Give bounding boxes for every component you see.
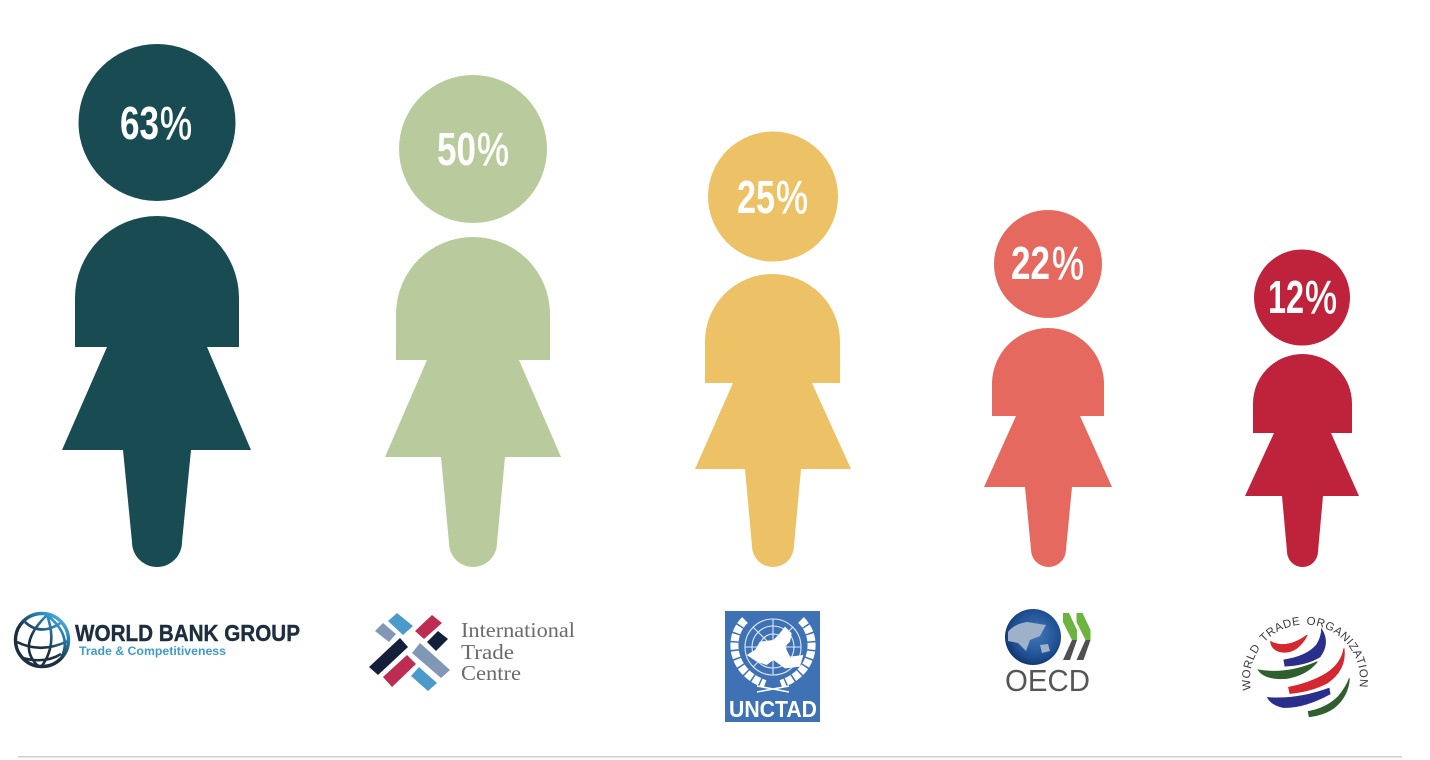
- value label 12%: %: [1305, 271, 1337, 323]
- icon: woven crescents: [1258, 629, 1349, 717]
- logo: UNCTAD: [725, 611, 820, 722]
- value label 25%: %: [776, 171, 808, 223]
- tagline: Trade & Competitiveness: [79, 644, 226, 658]
- figure: OECD 22%: [984, 210, 1112, 567]
- value label 22%: %: [1052, 237, 1084, 289]
- body: [695, 274, 851, 567]
- badge background: [725, 611, 820, 722]
- logo: World Bank Group: [16, 614, 300, 667]
- value label 12%: 12: [1268, 271, 1304, 323]
- value label 50%: 50: [437, 123, 476, 175]
- figure: World Bank Group 63%: [62, 44, 251, 567]
- head circle 12%: [1254, 250, 1350, 346]
- logo: OECD: [1005, 609, 1090, 698]
- logo: World Trade Organization: [1242, 616, 1368, 718]
- wordmark: Trade: [461, 640, 514, 664]
- icon: globe: [16, 614, 68, 667]
- head circle 50%: [399, 75, 547, 223]
- value label 50%: %: [477, 123, 509, 175]
- icon: woven bars: [369, 613, 450, 691]
- icon: UN emblem: [734, 619, 812, 692]
- figure: World Trade Organization 12%: [1245, 250, 1359, 567]
- body: [385, 237, 561, 567]
- figure: International Trade Centre 50%: [385, 75, 561, 567]
- wordmark: OECD: [1005, 663, 1090, 698]
- logo: International Trade Centre: [369, 613, 575, 691]
- value label 22%: 22: [1011, 237, 1050, 289]
- head circle 63%: [78, 44, 236, 201]
- head circle 25%: [708, 132, 838, 262]
- icon: globe: [1005, 609, 1061, 665]
- body: [984, 328, 1112, 567]
- wordmark: [461, 618, 575, 685]
- body: [62, 216, 251, 567]
- wordmark on arc: WORLD TRADE ORGANIZATION: [1242, 616, 1368, 691]
- body: [1245, 354, 1359, 567]
- wordmark: UNCTAD: [729, 696, 817, 722]
- wordmark: Centre: [461, 661, 521, 685]
- wordmark: WORLD BANK GROUP: [75, 620, 300, 646]
- icon: chevrons: [1063, 613, 1090, 660]
- value label 63%: %: [160, 97, 192, 149]
- value label 63%: 63: [120, 97, 159, 149]
- value label 25%: 25: [737, 171, 775, 223]
- figure: UNCTAD 25%: [695, 132, 851, 567]
- wordmark: International: [461, 618, 575, 642]
- head circle 22%: [994, 210, 1102, 318]
